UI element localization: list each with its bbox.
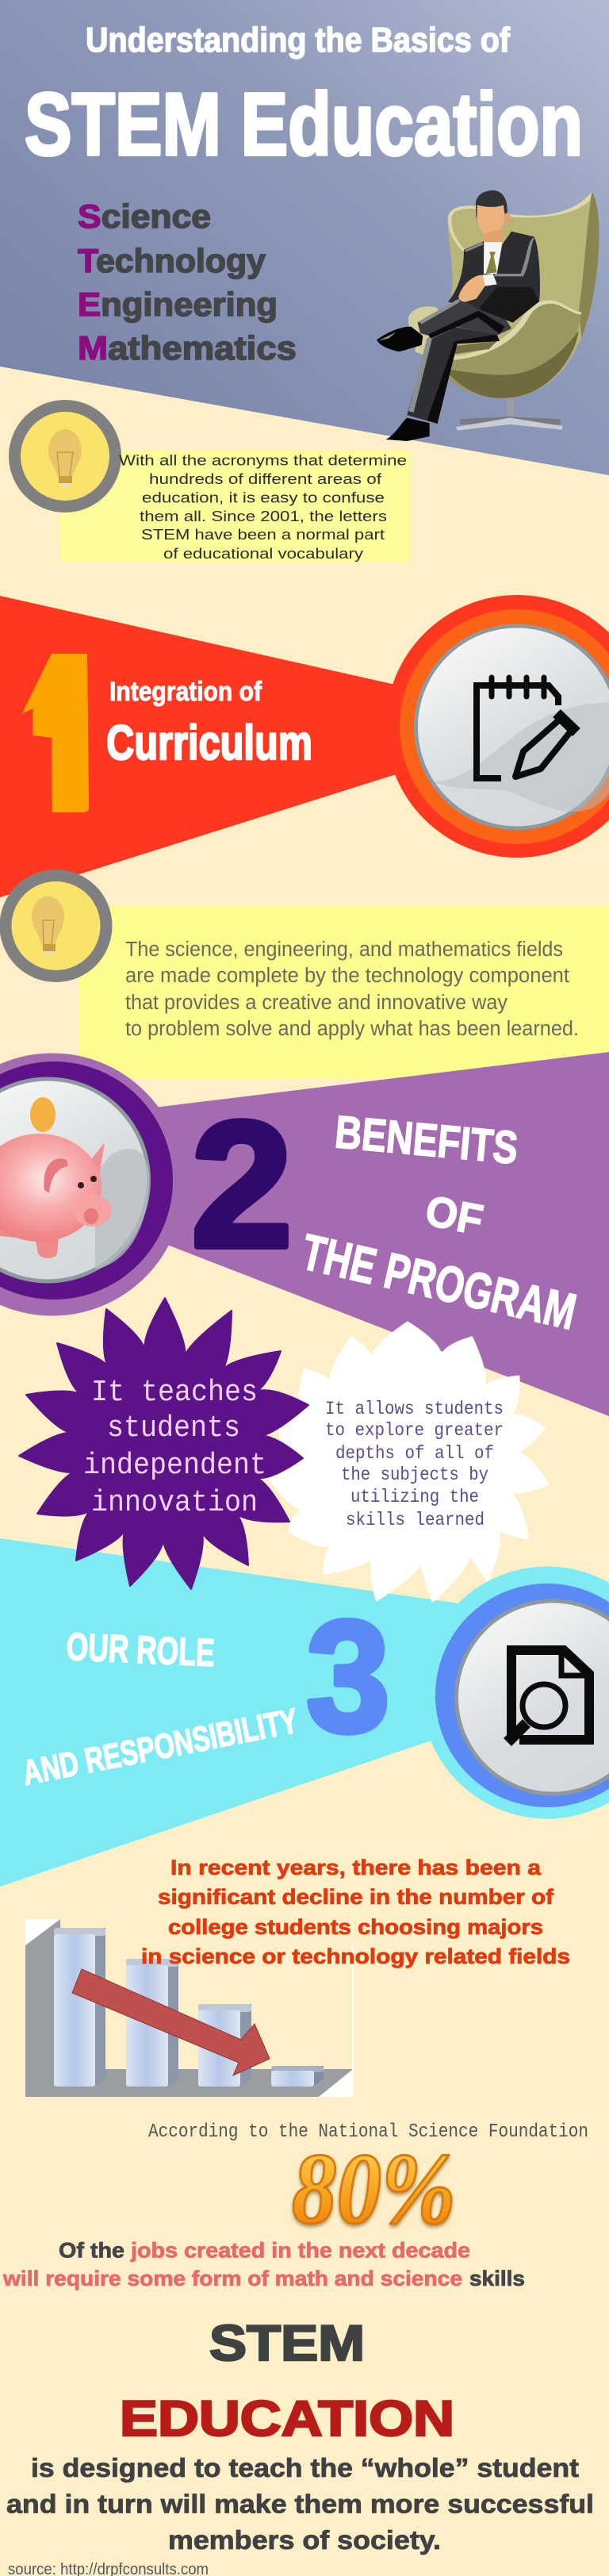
section 1 medallion: notepad icon [385,595,609,858]
section 3 banner [0,1538,476,1887]
heading: BENEFITS: BENEFITS [333,1106,520,1174]
heading: OUR ROLE: OUR ROLE [66,1626,216,1675]
jobs statement: Of the [59,2239,124,2263]
intro text: them all. Since 2001, the letters [140,508,387,524]
starburst text: utilizing the [350,1487,479,1507]
technology text [125,939,579,1040]
starburst text: It teaches [91,1376,258,1410]
technology text: that provides a creative and innovative way [125,992,508,1014]
intro text: hundreds of different areas of [149,470,382,487]
section 3 medallion: document search icon [421,1566,609,1818]
badge: purple starburst [19,1298,308,1589]
callout: technology yellow box [79,906,609,1079]
Engineering: Engineering [78,286,278,323]
arrow: decline [72,1969,270,2075]
Mathematics: Mathematics [78,329,297,367]
jobs statement [2,2239,525,2290]
technology text: to problem solve and apply what has been learned. [125,1018,579,1040]
intro text: education, it is easy to confuse [142,489,385,506]
starburst text: independent [83,1449,266,1483]
intro text: With all the acronyms that determine [119,452,407,468]
closing statement [6,2453,594,2555]
jobs statement: jobs created in the next decade [130,2239,470,2263]
closing heading: STEM: STEM [209,2316,365,2371]
starburst text: It allows students [325,1399,504,1419]
decline text [141,1856,570,1968]
bar 2 [126,1959,178,2087]
heading: Integration of: Integration of [109,677,262,707]
bar 4 [271,2066,324,2087]
starburst text: depths of all of [335,1443,494,1464]
jobs statement: will require some form of math and science [2,2267,462,2290]
numeral 2: 2 [191,1084,293,1284]
numeral 3: 3 [306,1588,390,1765]
section 2 medallion: piggy bank [0,1054,184,1315]
heading: AND RESPONSIBILITY: AND RESPONSIBILITY [20,1702,301,1793]
icon: document with magnifier [508,1650,589,1742]
icon: notepad [477,678,576,778]
icon: light bulb [9,400,121,513]
decline text: In recent years, there has been a [170,1856,542,1879]
Technology: Technology [78,242,266,279]
statistic: 80%: 80% [292,2133,456,2245]
starburst text: the subjects by [341,1465,488,1485]
icon: coin [30,1097,56,1132]
bar chart with declining arrow [25,1919,354,2097]
illustration: businessman in egg chair [377,190,599,441]
intro text: of educational vocabulary [163,545,364,562]
decline text: college students choosing majors [168,1915,543,1939]
badge: white starburst [270,1323,548,1601]
starburst text: students [107,1411,240,1445]
callout: intro yellow box [60,451,410,562]
starburst text [325,1399,504,1530]
bar 1 [54,1928,105,2087]
Science: Science [78,198,211,235]
heading: Curriculum: Curriculum [106,716,312,770]
header banner [0,0,609,475]
section 2 banner [135,1052,609,1416]
heading: OF: OF [422,1187,487,1245]
jobs statement: skills [469,2267,525,2290]
closing statement: and in turn will make them more successful [6,2490,594,2518]
starburst text [83,1376,266,1520]
icon: light bulb [0,870,113,982]
icon: piggy bank [0,1134,111,1258]
technology text: are made complete by the technology component [125,965,569,987]
decline text: significant decline in the number of [158,1885,554,1909]
closing heading: EDUCATION: EDUCATION [120,2391,454,2447]
technology text: The science, engineering, and mathematics fields [125,939,563,961]
decline text: in science or technology related fields [141,1944,570,1968]
intro text: STEM have been a normal part [141,526,385,543]
starburst text: skills learned [346,1510,485,1530]
intro text [119,452,407,562]
title: Understanding the Basics of: Understanding the Basics of [86,21,510,60]
section 1 banner [0,596,416,897]
starburst text: innovation [91,1486,258,1520]
bar 3 [198,2004,251,2087]
closing statement: is designed to teach the “whole” student [31,2453,579,2482]
acronym list [78,198,297,367]
closing statement: members of society. [168,2525,441,2555]
starburst text: to explore greater [325,1420,504,1441]
